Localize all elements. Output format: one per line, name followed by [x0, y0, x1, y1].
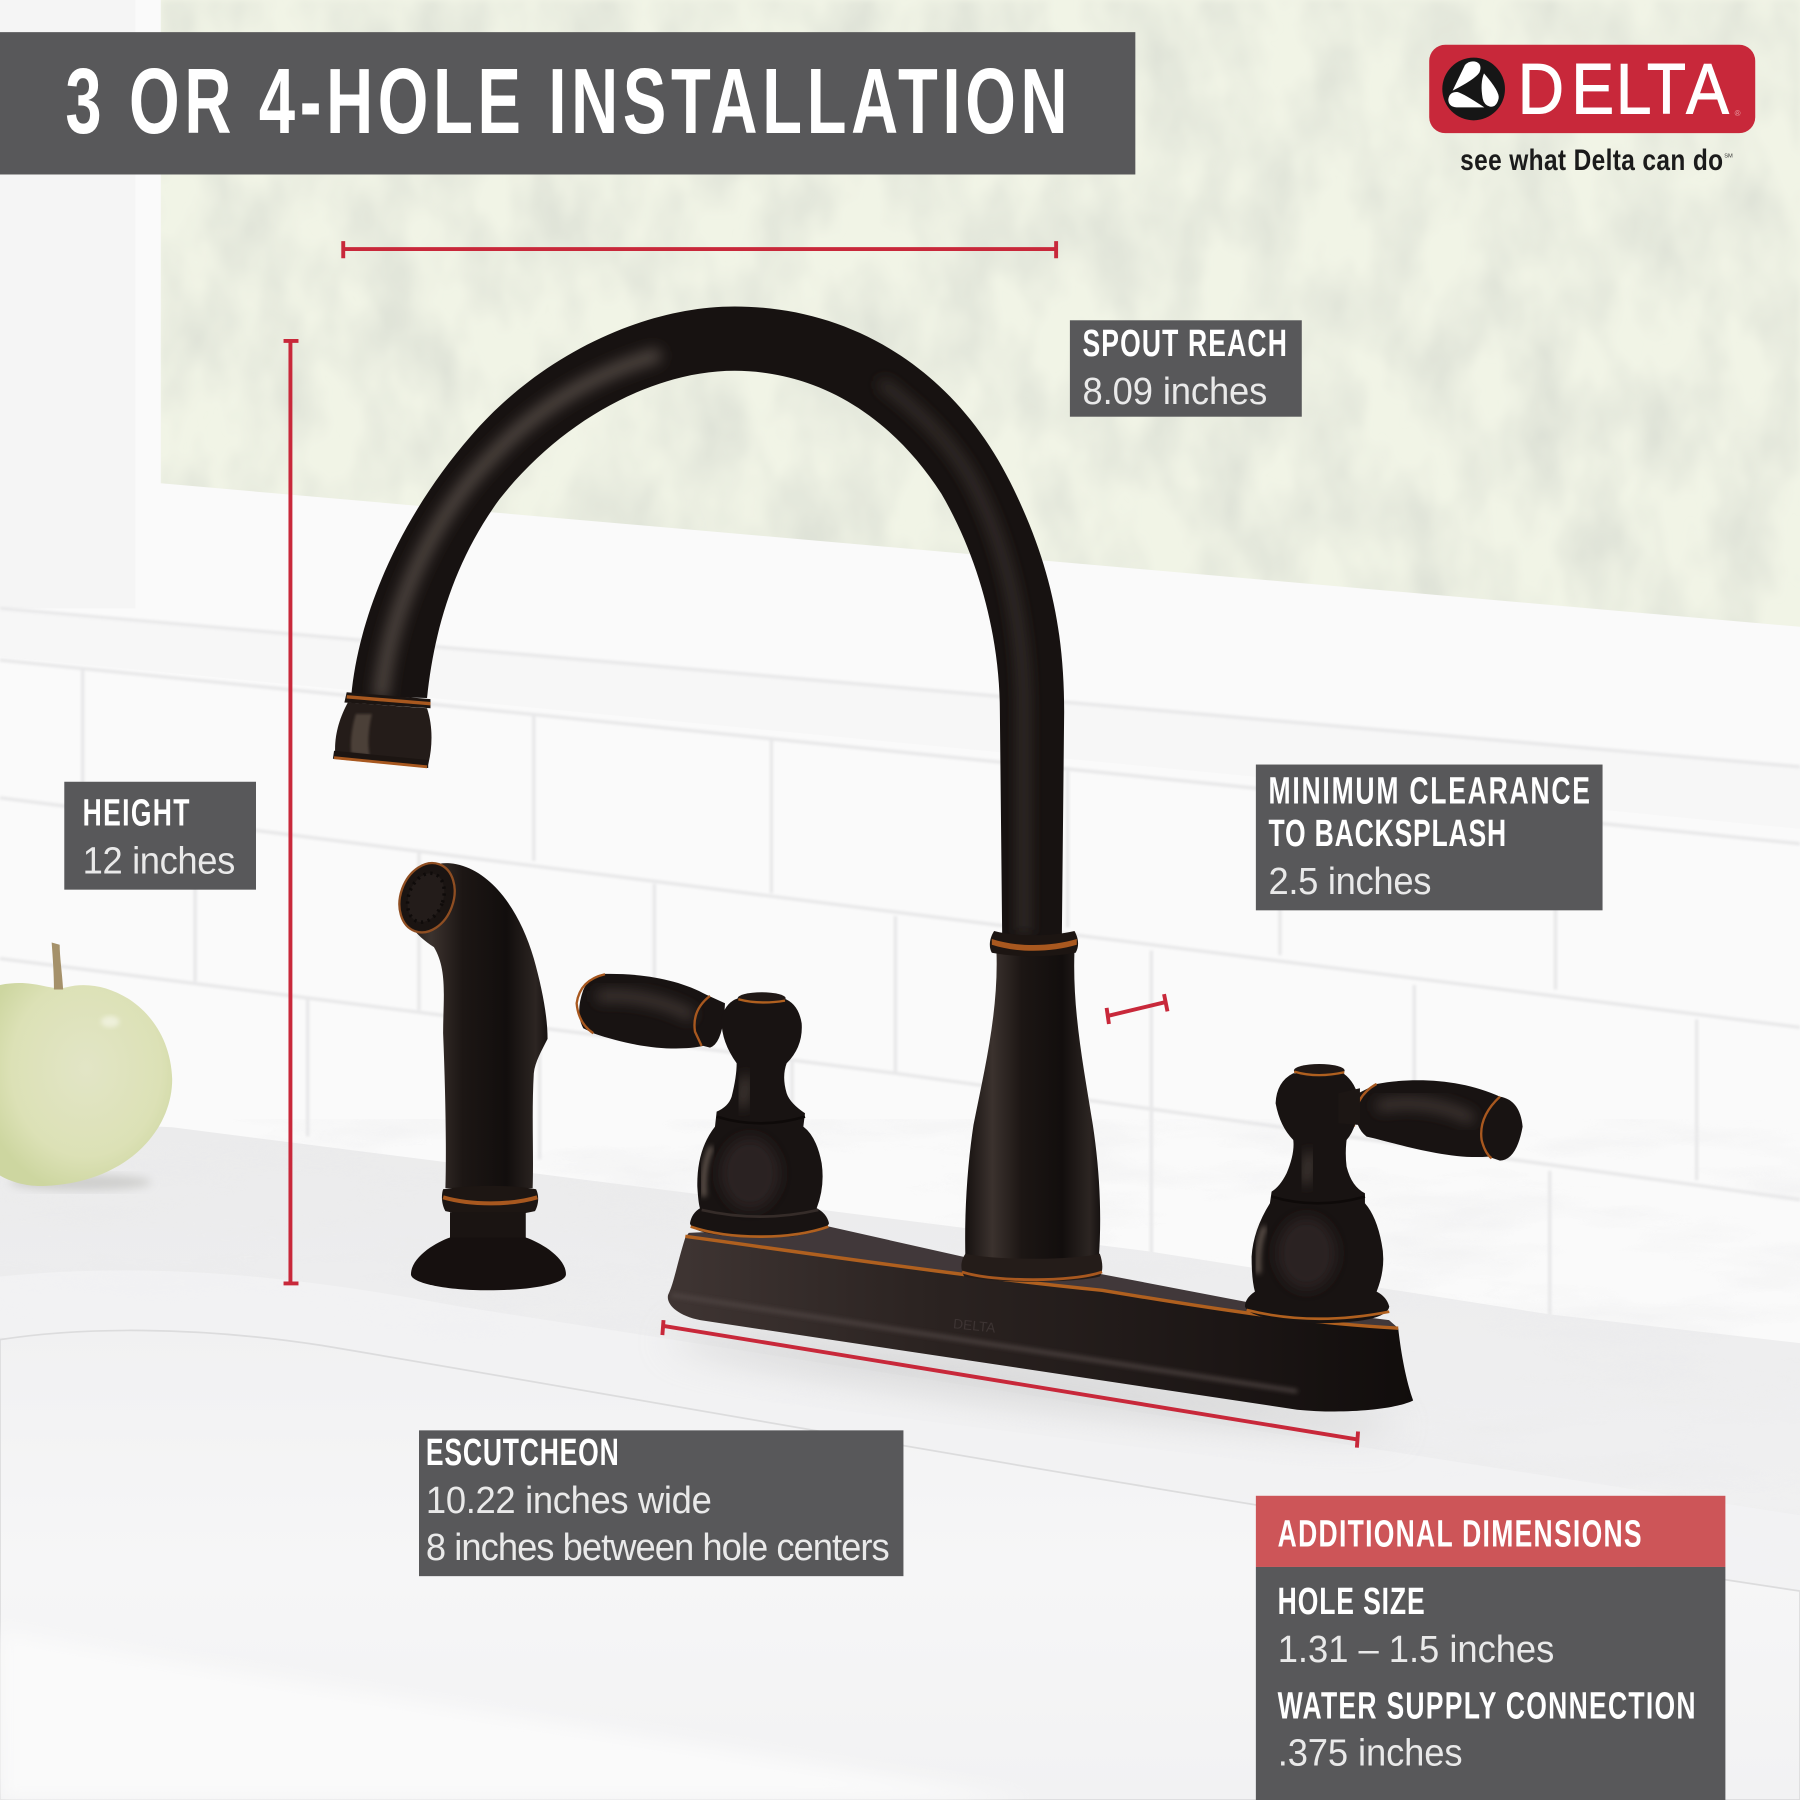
panel body [1256, 1567, 1725, 1800]
lever [579, 974, 725, 1049]
escutcheon deck [668, 1226, 1413, 1411]
panel: additional dimensions: HOLE SIZE [1278, 1579, 1425, 1622]
registered mark: ® [1735, 109, 1741, 118]
callout: height: HEIGHT [83, 791, 190, 833]
apple [0, 942, 172, 1190]
callout: spout reach: SPOUT REACH [1082, 321, 1287, 364]
dimension line: minimum clearance [1107, 994, 1167, 1024]
callout: minimum clearance: TO BACKSPLASH [1269, 811, 1506, 854]
screw cap [738, 992, 786, 1004]
callout: escutcheon: 8 inches between hole centers [426, 1525, 890, 1568]
panel: additional dimensions [1256, 1496, 1725, 1800]
stem and body [1245, 1073, 1389, 1323]
tagline: see what Delta can do [1460, 143, 1723, 176]
deck logo imprint: DELTA [952, 1316, 997, 1336]
callout: minimum clearance: MINIMUM CLEARANCE [1269, 769, 1590, 812]
callout: height: 12 inches [83, 839, 235, 882]
spout arch [351, 307, 1064, 936]
spout tip [333, 692, 432, 768]
panel: additional dimensions: .375 inches [1278, 1731, 1463, 1774]
callout: escutcheon: ESCUTCHEON [426, 1430, 619, 1473]
right handle [1245, 1064, 1523, 1323]
faucet [333, 307, 1523, 1451]
backsplash ledge shading [0, 611, 1800, 829]
frame side shade [0, 0, 135, 608]
callout: height [64, 782, 256, 890]
spout base body [961, 931, 1102, 1282]
title text: 3 OR 4-HOLE INSTALLATION [65, 50, 1068, 154]
apple highlight [101, 1016, 119, 1027]
Delta logo [1429, 45, 1755, 176]
dimension line: escutcheon width [662, 1320, 1358, 1448]
panel header [1256, 1496, 1725, 1567]
callout: escutcheon: 10.22 inches wide [426, 1478, 712, 1521]
stem and body [690, 998, 829, 1237]
logo emblem [1442, 58, 1505, 120]
dimension line: spout reach [343, 241, 1056, 258]
callout: minimum clearance [1256, 765, 1603, 910]
screw cap [1294, 1064, 1345, 1077]
marble veins [0, 1119, 1800, 1607]
title bar [0, 32, 1135, 174]
callout: spout reach: 8.09 inches [1083, 369, 1267, 412]
contact shadow [666, 1316, 1401, 1451]
apple shadow [9, 1174, 152, 1190]
apple body [0, 983, 172, 1186]
logo badge [1429, 45, 1755, 133]
callout: escutcheon [419, 1430, 903, 1576]
panel: additional dimensions: ADDITIONAL DIMENSIONS [1278, 1512, 1642, 1554]
lever [1355, 1080, 1523, 1161]
counter front edge [0, 1270, 1800, 1590]
countertop [0, 1119, 1800, 1607]
callout: spout reach [1070, 320, 1302, 417]
service mark: SM [1724, 153, 1733, 159]
dimension line: height [284, 341, 298, 1283]
panel: additional dimensions: 1.31 – 1.5 inches [1278, 1628, 1554, 1670]
panel: additional dimensions: WATER SUPPLY CONNECTION [1278, 1684, 1696, 1727]
side sprayer [390, 855, 566, 1290]
left handle [577, 974, 829, 1237]
logo wordmark: DELTA [1518, 51, 1730, 129]
window view of foliage [161, 0, 1800, 643]
callout: minimum clearance: 2.5 inches [1268, 860, 1431, 902]
apple stem [52, 942, 63, 990]
backsplash tile lines [0, 608, 1800, 1316]
sink basin [0, 1330, 1800, 1800]
window frame [0, 0, 1800, 1378]
sink inner shade [0, 1630, 1033, 1800]
